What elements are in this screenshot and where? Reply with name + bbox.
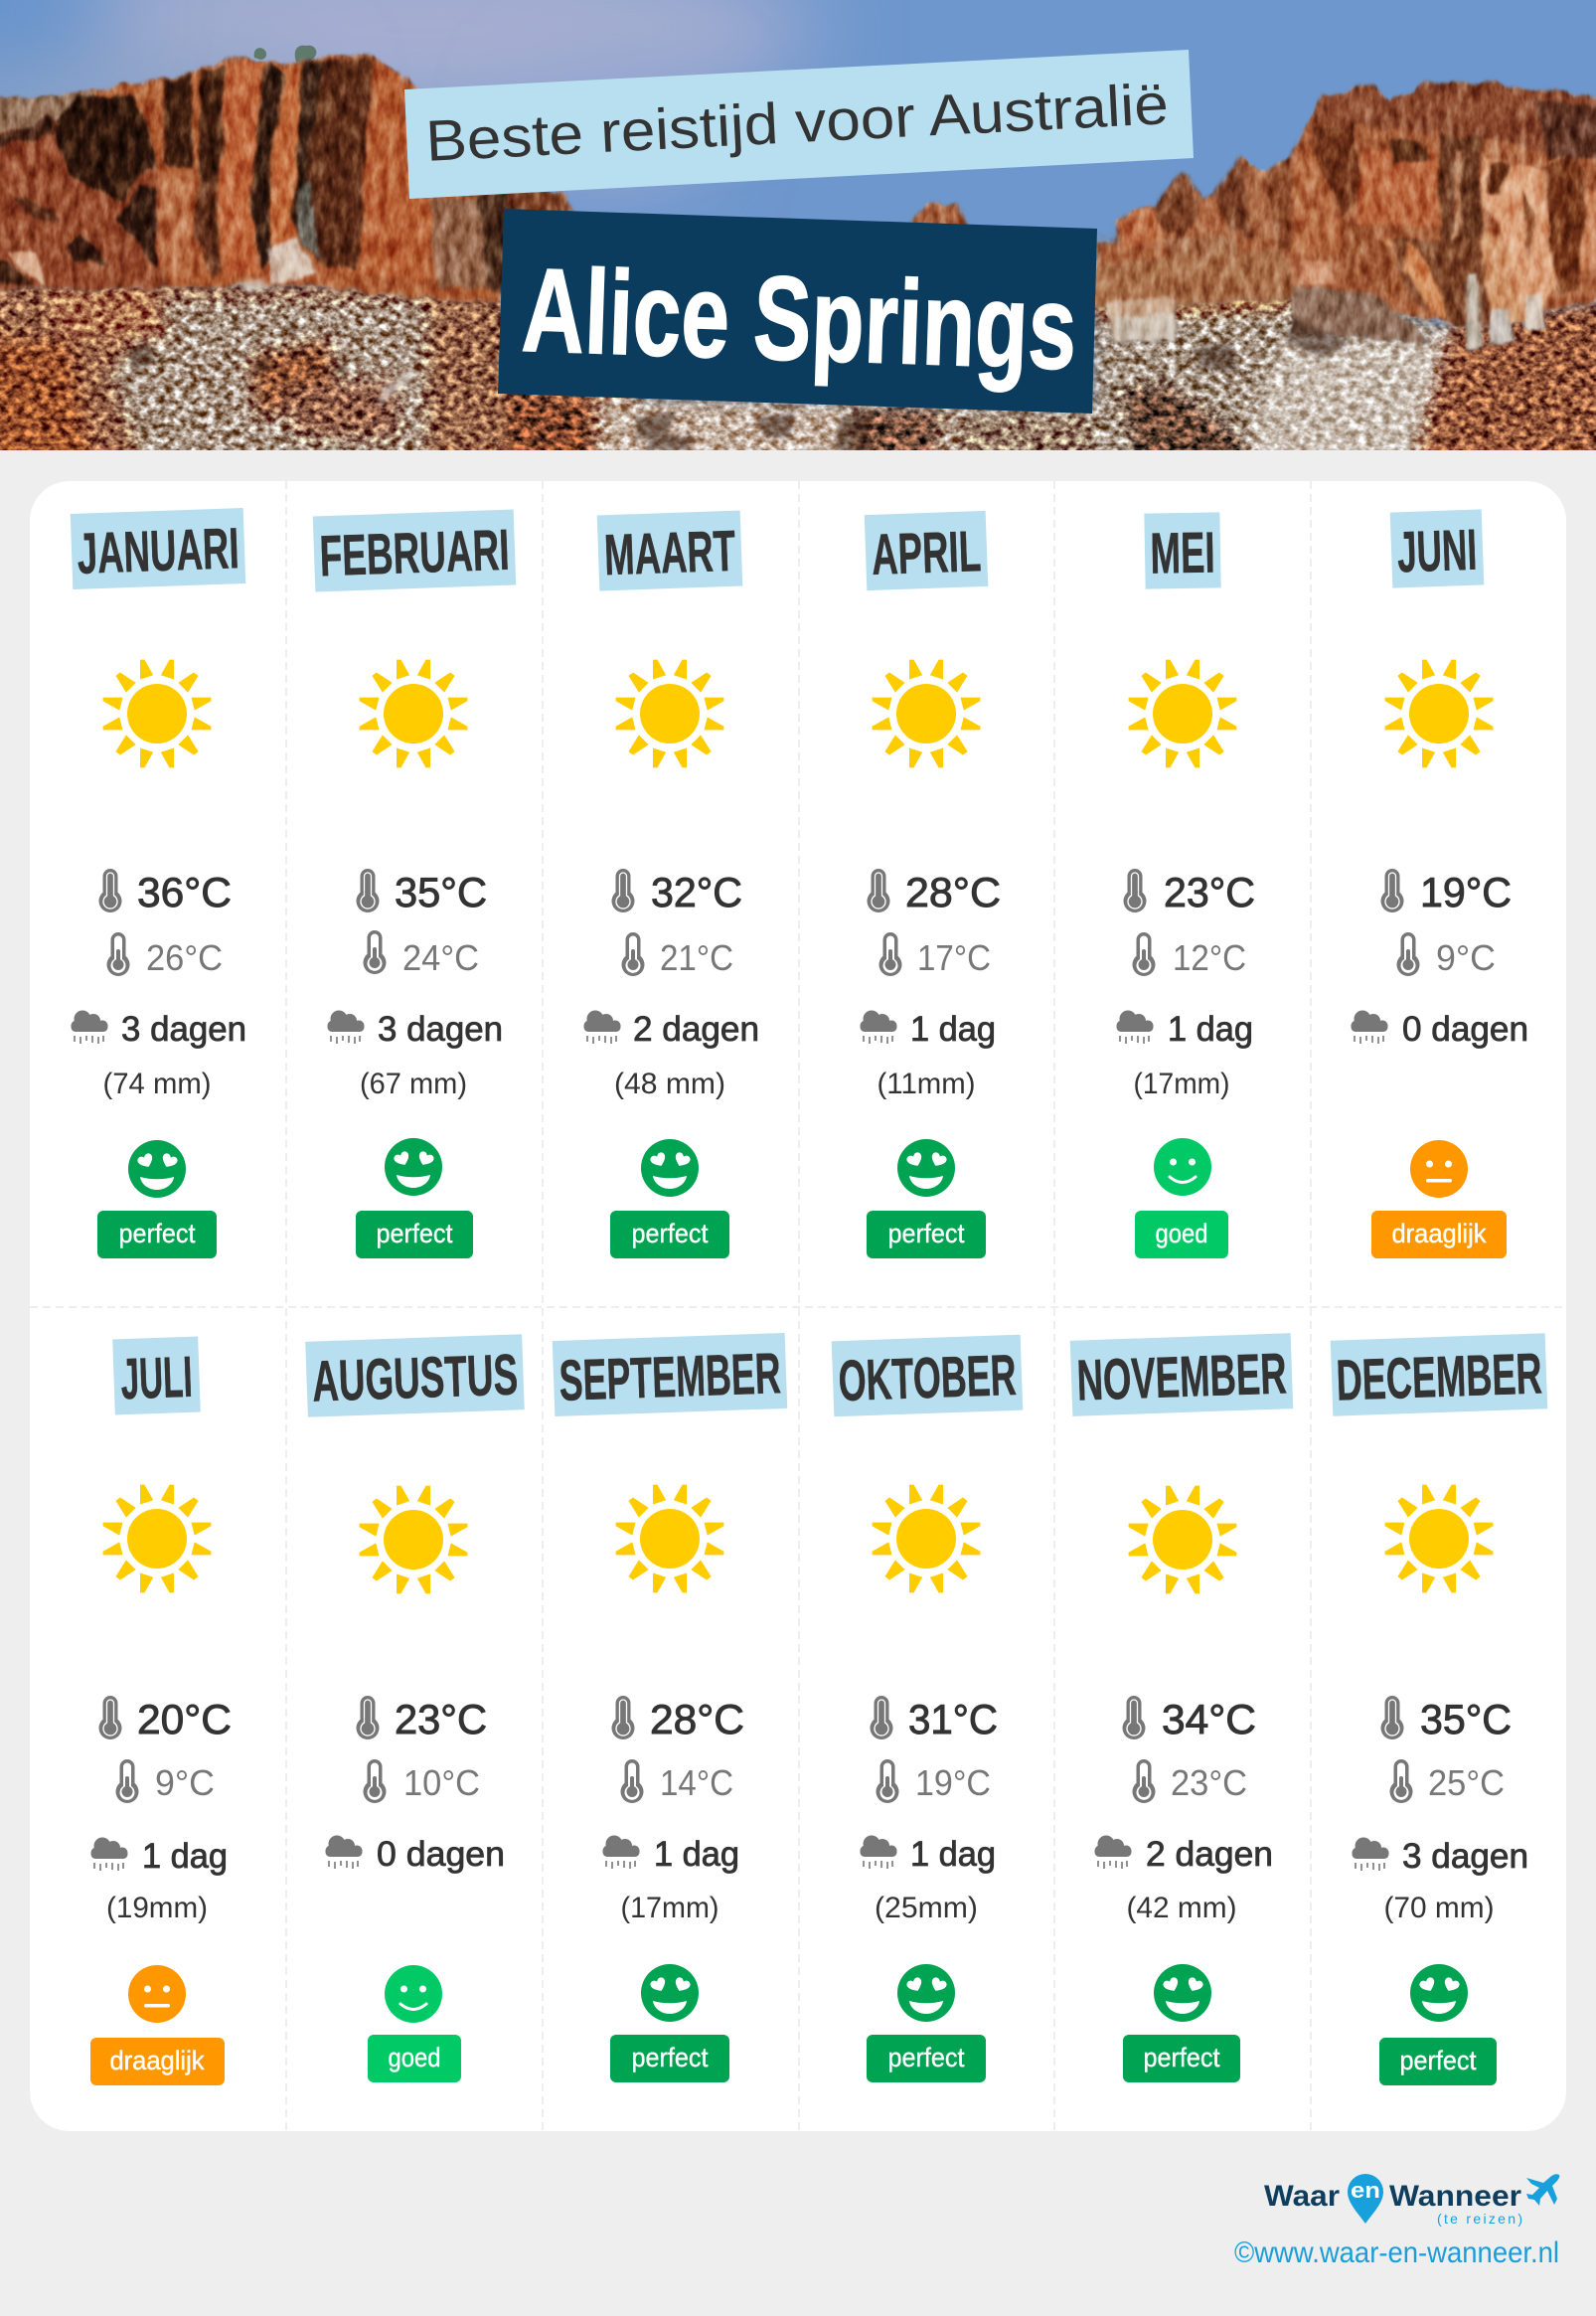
rating badge: perfect bbox=[376, 1219, 453, 1248]
rainfall: (42 mm) bbox=[1127, 1892, 1236, 1924]
icon: smiley goed bbox=[385, 1965, 442, 2023]
month: februari bbox=[313, 509, 516, 1258]
rain days: 1 dag bbox=[1168, 1010, 1253, 1049]
icon: smiley perfect bbox=[641, 1964, 699, 2022]
rain days: 1 dag bbox=[142, 1837, 228, 1876]
title block: Alice Springs bbox=[498, 209, 1097, 414]
heading: juli bbox=[112, 1337, 201, 1414]
month: mei bbox=[1117, 512, 1255, 1258]
heading: maart: MAART bbox=[603, 519, 736, 587]
logo: Waar en Wanneer: Wanneer bbox=[1389, 2180, 1521, 2213]
icon: location pin: en bbox=[1351, 2178, 1380, 2203]
icon: smiley perfect bbox=[1154, 1964, 1211, 2022]
heading: mei bbox=[1144, 512, 1221, 589]
rating badge bbox=[1379, 2038, 1497, 2085]
month: juli bbox=[90, 1337, 232, 2085]
title block: Alice Springs: Alice Springs bbox=[520, 244, 1078, 395]
icon: smiley perfect bbox=[897, 1964, 955, 2022]
max temperature bbox=[1123, 1696, 1256, 1742]
rating badge bbox=[97, 1211, 217, 1258]
min temperature bbox=[115, 1759, 215, 1803]
max temperature: 34°C bbox=[1162, 1696, 1256, 1742]
rating badge: perfect bbox=[1143, 2043, 1220, 2072]
header photo: red rock cliffs under blue sky bbox=[0, 0, 1596, 477]
month: augustus bbox=[305, 1334, 525, 2082]
min temperature bbox=[1133, 932, 1246, 978]
max temperature: 36°C bbox=[137, 869, 232, 915]
min temperature bbox=[364, 1759, 480, 1803]
min temperature: 9°C bbox=[1436, 937, 1496, 978]
logo: Waar en Wanneer: (te reizen) bbox=[1437, 2211, 1522, 2227]
heading: mei: MEI bbox=[1150, 520, 1215, 586]
heading: februari bbox=[313, 509, 516, 592]
max temperature: 35°C bbox=[1420, 1696, 1512, 1742]
rating badge bbox=[1135, 1211, 1228, 1258]
icon: sun bbox=[873, 1485, 980, 1592]
min temperature: 26°C bbox=[146, 937, 223, 978]
icon: sun bbox=[360, 1486, 467, 1593]
heading: september bbox=[553, 1333, 787, 1416]
max temperature: 19°C bbox=[1420, 869, 1512, 915]
max temperature: 28°C bbox=[650, 1696, 744, 1742]
max temperature: 31°C bbox=[908, 1696, 998, 1742]
rainfall: (17mm) bbox=[620, 1892, 719, 1924]
icon: sun bbox=[1129, 660, 1236, 767]
rainfall: (11mm) bbox=[877, 1068, 976, 1100]
rain days: 3 dagen bbox=[378, 1010, 503, 1049]
min temperature bbox=[622, 932, 733, 978]
icon: smiley perfect bbox=[1410, 1964, 1468, 2022]
min temperature bbox=[1397, 932, 1496, 978]
rating badge bbox=[1371, 1211, 1507, 1258]
rainfall: (74 mm) bbox=[103, 1068, 211, 1100]
rain days: 3 dagen bbox=[121, 1010, 246, 1049]
rating badge: perfect bbox=[1399, 2046, 1477, 2075]
heading: november bbox=[1070, 1333, 1293, 1416]
heading: september: SEPTEMBER bbox=[559, 1341, 782, 1413]
icon: sun bbox=[616, 1485, 723, 1592]
month: maart bbox=[584, 511, 759, 1258]
rainfall: (67 mm) bbox=[360, 1068, 467, 1100]
min temperature bbox=[364, 930, 479, 978]
icon: sun bbox=[873, 660, 980, 767]
rain days: 1 dag bbox=[910, 1835, 996, 1874]
rating badge bbox=[356, 1211, 473, 1258]
title strip: Beste reistijd voor Australië: Beste reistijd voor Australië bbox=[424, 72, 1170, 174]
icon: sun bbox=[1385, 660, 1493, 767]
icon: smiley draaglijk bbox=[1410, 1140, 1468, 1198]
min temperature bbox=[620, 1759, 733, 1803]
icon: location pin bbox=[1348, 2174, 1383, 2224]
min temperature: 19°C bbox=[915, 1762, 991, 1803]
min temperature: 9°C bbox=[155, 1762, 215, 1803]
icon: sun bbox=[103, 660, 211, 767]
rating badge bbox=[867, 2035, 986, 2082]
max temperature bbox=[1123, 869, 1255, 915]
rainfall: (70 mm) bbox=[1383, 1892, 1495, 1924]
min temperature bbox=[1389, 1759, 1505, 1803]
heading: juni bbox=[1390, 509, 1484, 588]
heading: maart bbox=[597, 511, 742, 590]
heading: augustus bbox=[305, 1334, 525, 1417]
min temperature: 24°C bbox=[402, 937, 479, 978]
rating badge: perfect bbox=[888, 1219, 965, 1248]
max temperature bbox=[612, 869, 742, 915]
rating badge: goed bbox=[388, 2043, 441, 2072]
min temperature: 17°C bbox=[917, 937, 991, 978]
max temperature: 28°C bbox=[905, 869, 1001, 915]
heading: juni: JUNI bbox=[1396, 518, 1478, 584]
icon: sun bbox=[1385, 1485, 1493, 1592]
icon: smiley perfect bbox=[385, 1138, 442, 1196]
max temperature bbox=[1381, 869, 1512, 915]
rating badge: perfect bbox=[888, 2043, 965, 2072]
month: juni bbox=[1352, 509, 1528, 1258]
heading: oktober bbox=[832, 1335, 1023, 1416]
icon: smiley draaglijk bbox=[128, 1965, 186, 2023]
min temperature: 10°C bbox=[403, 1762, 480, 1803]
min temperature: 12°C bbox=[1173, 937, 1246, 978]
rating badge: draaglijk bbox=[109, 2046, 205, 2075]
heading: oktober: OKTOBER bbox=[838, 1343, 1018, 1413]
min temperature: 23°C bbox=[1171, 1762, 1247, 1803]
rating badge bbox=[368, 2035, 461, 2082]
max temperature: 20°C bbox=[137, 1696, 232, 1742]
rain days: 0 dagen bbox=[377, 1835, 505, 1874]
rain days: 1 dag bbox=[910, 1010, 996, 1049]
rating badge bbox=[1123, 2035, 1240, 2082]
month: oktober bbox=[832, 1335, 1023, 2082]
rating badge: perfect bbox=[119, 1219, 196, 1248]
min temperature: 25°C bbox=[1428, 1762, 1505, 1803]
title strip: Beste reistijd voor Australië bbox=[404, 50, 1194, 199]
icon: sun bbox=[616, 660, 723, 767]
heading: november: NOVEMBER bbox=[1076, 1341, 1288, 1413]
min temperature: 21°C bbox=[660, 937, 733, 978]
icon: smiley goed bbox=[1154, 1138, 1211, 1196]
min temperature bbox=[107, 932, 223, 978]
icon: sun bbox=[1129, 1486, 1236, 1593]
heading: januari bbox=[71, 508, 245, 589]
logo: Waar en Wanneer bbox=[1264, 2174, 1559, 2227]
month: november bbox=[1070, 1333, 1293, 2082]
max temperature: 32°C bbox=[651, 869, 742, 915]
month: april bbox=[861, 511, 1001, 1258]
icon: sun bbox=[360, 660, 467, 767]
rain days bbox=[1117, 1010, 1253, 1049]
max temperature bbox=[1381, 1696, 1512, 1742]
heading: februari: FEBRUARI bbox=[319, 518, 511, 588]
rating badge: perfect bbox=[632, 1219, 709, 1248]
rating badge bbox=[90, 2038, 225, 2085]
icon: sun bbox=[103, 1485, 211, 1592]
icon: airplane bbox=[1526, 2174, 1559, 2206]
rain days: 1 dag bbox=[654, 1835, 739, 1874]
month: januari bbox=[71, 508, 246, 1258]
rainfall: (25mm) bbox=[875, 1892, 978, 1924]
max temperature: 35°C bbox=[395, 869, 487, 915]
icon: smiley perfect bbox=[897, 1139, 955, 1197]
heading: januari: JANUARI bbox=[77, 516, 240, 586]
rainfall: (48 mm) bbox=[614, 1068, 725, 1100]
rating badge: goed bbox=[1155, 1219, 1208, 1248]
min temperature bbox=[877, 1759, 991, 1803]
max temperature bbox=[867, 869, 1001, 915]
rain days: 2 dagen bbox=[633, 1010, 759, 1049]
rain days bbox=[861, 1010, 996, 1049]
rain days bbox=[602, 1835, 739, 1874]
rating badge bbox=[610, 2035, 729, 2082]
rain days bbox=[861, 1835, 996, 1874]
heading: april bbox=[865, 511, 988, 590]
rainfall: (19mm) bbox=[106, 1892, 208, 1924]
icon: smiley perfect bbox=[128, 1140, 186, 1198]
rain days: 3 dagen bbox=[1402, 1837, 1528, 1876]
heading: april: APRIL bbox=[871, 519, 982, 587]
rain days: 0 dagen bbox=[1402, 1010, 1528, 1049]
rating badge bbox=[610, 1211, 729, 1258]
month: september bbox=[553, 1333, 787, 2082]
logo: Waar en Wanneer: Waar bbox=[1264, 2180, 1340, 2213]
rainfall: (17mm) bbox=[1133, 1068, 1230, 1100]
min temperature: 14°C bbox=[660, 1762, 733, 1803]
icon: smiley perfect bbox=[641, 1139, 699, 1197]
max temperature: 23°C bbox=[395, 1696, 487, 1742]
month: december bbox=[1331, 1333, 1547, 2085]
website url: ©www.waar-en-wanneer.nl bbox=[1234, 2236, 1559, 2269]
heading: augustus: AUGUSTUS bbox=[311, 1342, 519, 1414]
max temperature bbox=[871, 1696, 998, 1742]
rain days bbox=[91, 1837, 228, 1876]
rain days: 2 dagen bbox=[1146, 1835, 1273, 1874]
rating badge: draaglijk bbox=[1391, 1219, 1487, 1248]
heading: juli: JULI bbox=[119, 1345, 194, 1411]
panel: monthly climate table bbox=[30, 481, 1566, 2131]
min temperature bbox=[878, 932, 991, 978]
min temperature bbox=[1133, 1759, 1247, 1803]
max temperature: 23°C bbox=[1164, 869, 1255, 915]
rating badge bbox=[867, 1211, 986, 1258]
rating badge: perfect bbox=[632, 2043, 709, 2072]
